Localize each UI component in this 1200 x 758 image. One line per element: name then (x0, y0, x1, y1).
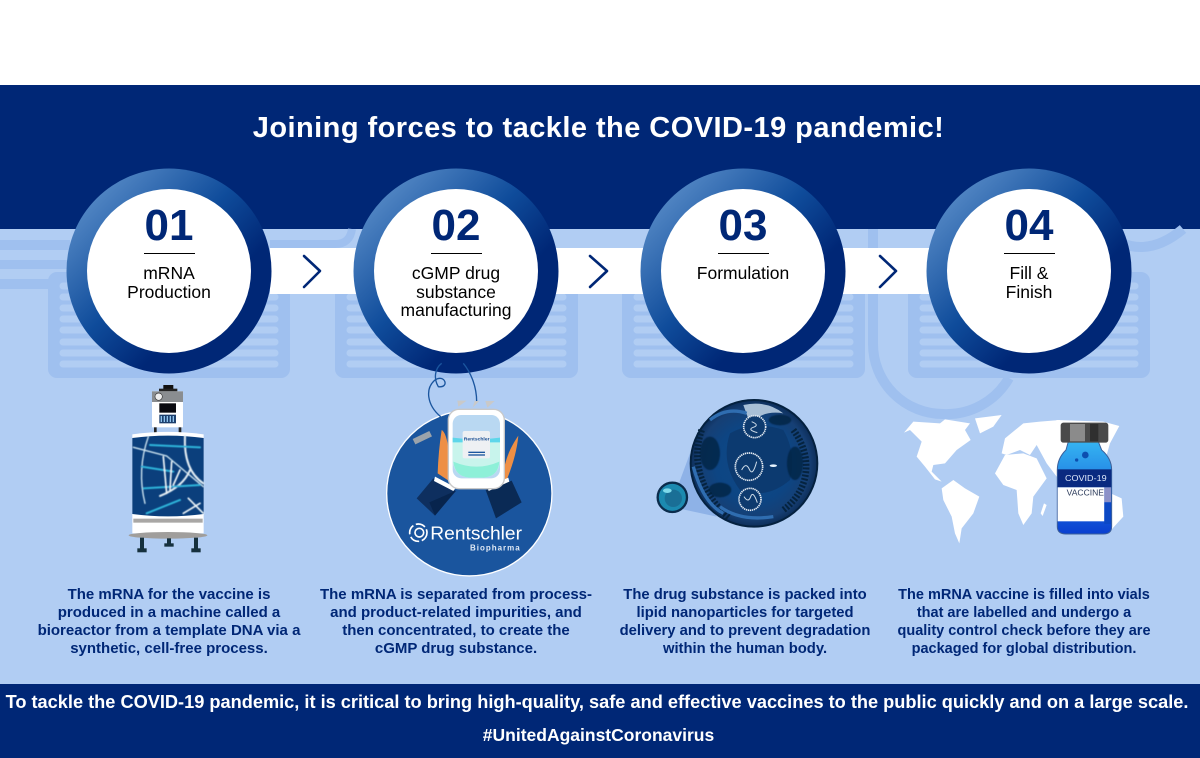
text: step 2 description: cGMP drug substance. (375, 640, 537, 657)
text: step 1 description (38, 586, 301, 657)
hashtag: #UnitedAgainstCoronavirus (483, 725, 714, 745)
step 4 circle (926, 168, 1132, 374)
step 3 circle: Formulation (697, 263, 789, 283)
step 4 circle: Finish (1006, 282, 1052, 302)
text: step 3 description (620, 587, 870, 657)
text: step 1 description: produced in a machine called a (58, 604, 280, 621)
light blue background with faded equipment pattern (0, 229, 1200, 684)
text: step 4 description: packaged for global distribution. (912, 641, 1136, 657)
title: Joining forces to tackle the COVID-19 pandemic! (253, 112, 944, 144)
text: step 2 description: The mRNA is separated from process- (320, 586, 592, 603)
step 2 circle: cGMP drug (412, 263, 500, 283)
step 3 circle (640, 168, 846, 374)
step 1 circle: Production (127, 282, 211, 302)
header band (0, 85, 1200, 229)
step 2 circle: 02 (432, 201, 480, 250)
text: step 4 description (897, 587, 1151, 657)
step 3 circle: 03 (719, 201, 767, 250)
step 2 circle (354, 168, 558, 374)
text: step 2 description: and product-related impurities, and (330, 604, 582, 621)
step 1 circle: mRNA (143, 263, 195, 283)
text: step 4 description: quality control check before they are (897, 623, 1151, 639)
step 4 circle: 04 (1005, 201, 1053, 250)
connector bar (270, 248, 942, 294)
step 1 circle (66, 168, 272, 374)
text: step 1 description: bioreactor from a template DNA via a (38, 622, 300, 639)
text: step 4 description: that are labelled and undergo a (917, 605, 1131, 621)
step 1 circle: 01 (145, 201, 193, 250)
step 2 circle: substance (416, 282, 496, 302)
step 2 circle: manufacturing (401, 300, 511, 320)
icon: drug substance bag held in hands: Rentschler (430, 522, 522, 543)
icon: drug substance bag held in hands: Biopharma (470, 543, 521, 552)
footer sentence: To tackle the COVID-19 pandemic, it is critical to bring high-quality, safe and effective vaccines to the public quickly and on a large scale. (6, 692, 1188, 712)
text: step 1 description: The mRNA for the vaccine is (68, 586, 270, 603)
text: step 4 description: The mRNA vaccine is filled into vials (898, 587, 1150, 603)
icon: drug substance bag held in hands: Rentschler (464, 436, 490, 442)
text: step 1 description: synthetic, cell-free process. (70, 640, 268, 657)
text: step 3 description: within the human body. (663, 641, 827, 657)
text: step 3 description: delivery and to prevent degradation (620, 623, 870, 639)
text: step 3 description: The drug substance is packed into (623, 587, 867, 603)
icon: world map with vaccine vial: VACCINE (1067, 488, 1104, 497)
step 4 circle: Fill & (1010, 263, 1048, 283)
text: step 3 description: lipid nanoparticles for targeted (636, 605, 854, 621)
text: step 2 description (320, 586, 592, 657)
footer band with closing message (0, 684, 1200, 758)
text: step 2 description: then concentrated, to create the (342, 622, 570, 639)
icon: world map with vaccine vial: COVID-19 (1065, 473, 1107, 483)
